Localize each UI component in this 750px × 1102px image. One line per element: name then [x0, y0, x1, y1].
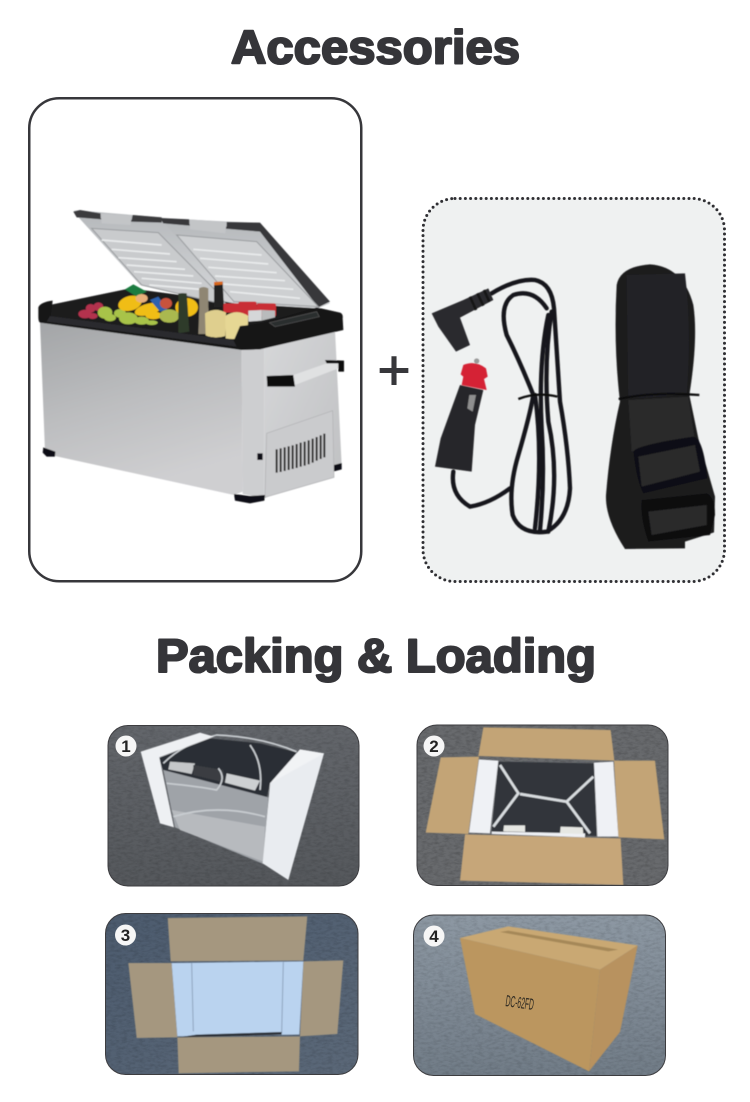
photo 4: sealed carton: [413, 915, 666, 1076]
photo 3: foam cover in open carton: [105, 913, 359, 1075]
step badge 2: [424, 736, 444, 756]
photo outline: [108, 726, 359, 886]
fridge front panel: [40, 322, 243, 495]
dark fridge lid: [492, 762, 597, 836]
step badge 3: [115, 924, 136, 946]
cable tie: [518, 395, 557, 399]
plus sign: +: [377, 338, 411, 402]
left lid ribs: [102, 240, 208, 290]
control panel: [269, 312, 319, 327]
foam blocks: [469, 759, 498, 833]
photo 1: fridge in foam and plastic: [108, 725, 359, 886]
foam cover: [172, 961, 303, 1036]
panel frame: [29, 98, 361, 581]
panel: fridge: [29, 98, 361, 581]
strap tie: [619, 394, 699, 399]
plastic wrap lines: [493, 765, 593, 833]
food: beige cans: [205, 310, 226, 338]
foam end right: [263, 749, 324, 880]
step badge 4: 4: [429, 927, 439, 946]
handle: [267, 375, 295, 387]
photo outline: [417, 725, 668, 886]
food: bottles: [178, 293, 189, 333]
right lid ribs: [193, 249, 300, 298]
power cable: [453, 280, 570, 532]
step badge 1: 1: [121, 737, 131, 756]
step badge 4: [424, 926, 444, 946]
step badge 3: 3: [121, 926, 130, 945]
strap buckle upper: [633, 437, 707, 493]
food: red cans: [223, 302, 276, 317]
fridge side panel: [264, 330, 342, 498]
carton front: [460, 938, 600, 1071]
step badge 1: [116, 736, 136, 756]
carton side: [589, 945, 638, 1071]
plug body: [435, 385, 483, 472]
carton top: [460, 926, 638, 970]
illustration: portable fridge: [38, 210, 344, 503]
title: Packing & Loading: Packing & Loading: [156, 629, 596, 682]
shoulder strap: [606, 264, 715, 549]
photo 2: fridge in open carton: [417, 725, 668, 886]
carton flaps: [426, 727, 664, 885]
carton model code: DC-62FD: [504, 992, 535, 1014]
red cigarette plug: [461, 363, 488, 390]
top rim: [38, 301, 343, 350]
photo outline: [414, 915, 666, 1076]
photo outline: [106, 914, 358, 1074]
left lid: [73, 210, 234, 303]
wrapped fridge: [158, 738, 298, 797]
step badge 2: 2: [429, 737, 439, 756]
rear interior wall: [42, 288, 320, 347]
feet and socket: [43, 447, 342, 503]
vent grille: [277, 434, 324, 473]
dotted frame: [423, 198, 724, 582]
food: green grapes and fruit: [98, 307, 158, 325]
food: grapes: [78, 302, 103, 319]
title: Accessories: Accessories: [231, 20, 520, 74]
right lid: [160, 218, 330, 308]
carton flaps: [128, 916, 343, 1073]
angled DC plug: [432, 288, 493, 352]
panel: accessories cable and strap: [423, 198, 724, 582]
foam end left: [141, 733, 214, 827]
strap buckle lower: [641, 493, 715, 542]
